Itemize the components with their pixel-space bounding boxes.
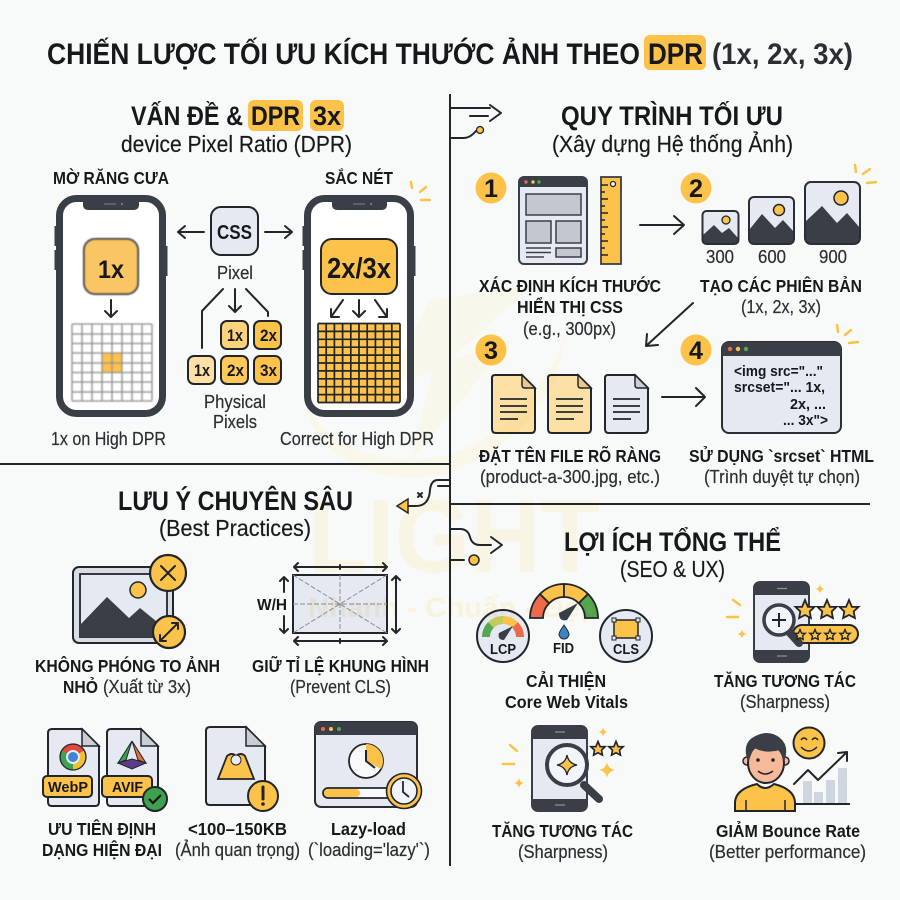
practice: modern formats bbox=[42, 729, 167, 860]
CSS pixel diagram: Pixels bbox=[213, 411, 257, 432]
benefit: engagement with sharpness: TĂNG TƯƠNG TÁC bbox=[492, 820, 633, 841]
phone: 2x/3x sharp bbox=[302, 182, 430, 414]
step 4: <img src="..." bbox=[734, 363, 823, 380]
step 1: XÁC ĐỊNH KÍCH THƯỚC bbox=[479, 275, 661, 296]
title: (1x, 2x, 3x) bbox=[712, 38, 853, 71]
watermark: LIGHT logo bbox=[305, 284, 600, 623]
CSS pixel diagram: 2x bbox=[260, 326, 277, 345]
label: blurry: MỜ RĂNG CƯA bbox=[53, 167, 169, 188]
arrow: step 3 to 4 bbox=[662, 388, 705, 406]
benefit: core web vitals: LCP bbox=[490, 642, 516, 658]
step 4: 4 bbox=[689, 337, 703, 365]
CSS pixel diagram: 2x bbox=[227, 361, 244, 380]
practice: keep aspect ratio: W/H bbox=[257, 597, 287, 614]
heading: best practices bbox=[118, 485, 353, 541]
step 2: TẠO CÁC PHIÊN BẢN bbox=[700, 275, 862, 296]
step 2 bbox=[680, 165, 876, 317]
benefit: core web vitals bbox=[477, 584, 652, 712]
step 4: ... 3x"> bbox=[783, 412, 828, 429]
benefit: core web vitals: CẢI THIỆN bbox=[526, 670, 606, 691]
heading: process bbox=[552, 99, 793, 157]
step 2: (1x, 2x, 3x) bbox=[741, 296, 821, 317]
heading: process: QUY TRÌNH TỐI ƯU bbox=[561, 99, 783, 131]
step 1 bbox=[476, 172, 661, 339]
benefit: engagement with rating: TĂNG TƯƠNG TÁC bbox=[714, 670, 856, 691]
benefit: lower bounce rate: (Better performance) bbox=[709, 841, 866, 862]
panel: overall benefits bbox=[477, 526, 866, 862]
step 4: srcset="... 1x, bbox=[734, 379, 825, 396]
benefit: engagement with sharpness bbox=[492, 726, 633, 862]
heading: best practices: LƯU Ý CHUYÊN SÂU bbox=[118, 485, 353, 516]
practice: lazy load bbox=[308, 722, 430, 860]
benefit: core web vitals: Core Web Vitals bbox=[505, 692, 628, 712]
benefit: engagement with rating: (Sharpness) bbox=[740, 691, 830, 712]
step 4 bbox=[680, 325, 874, 487]
benefit: engagement with sharpness: (Sharpness) bbox=[518, 841, 608, 862]
heading: best practices: (Best Practices) bbox=[159, 515, 311, 541]
practice: modern formats: AVIF bbox=[112, 779, 143, 796]
panel: optimisation process bbox=[476, 99, 876, 487]
CSS pixel diagram: CSS bbox=[217, 222, 252, 244]
practice: no upscaling: (Xuất từ 3x) bbox=[103, 676, 191, 697]
practice: keep aspect ratio: GIỮ TỈ LỆ KHUNG HÌNH bbox=[252, 655, 429, 676]
panel: problem and DPR bbox=[51, 100, 434, 449]
practice: file size bbox=[175, 727, 300, 860]
step 3: ĐẶT TÊN FILE RÕ RÀNG bbox=[479, 445, 661, 466]
arrow: step 2 to 3 bbox=[646, 303, 693, 346]
title: CHIẾN LƯỢC TỐI ƯU KÍCH THƯỚC ẢNH THEO bbox=[47, 37, 640, 71]
heading: problem: DPR bbox=[251, 101, 300, 131]
step 4: (Trình duyệt tự chọn) bbox=[704, 466, 860, 487]
title: DPR bbox=[648, 38, 703, 71]
heading: benefits bbox=[564, 526, 781, 582]
practice: no upscaling: KHÔNG PHÓNG TO ẢNH bbox=[35, 655, 220, 676]
practice: keep aspect ratio: (Prevent CLS) bbox=[290, 676, 391, 697]
step 3 bbox=[476, 334, 661, 487]
benefit: lower bounce rate bbox=[709, 728, 866, 862]
CSS pixel diagram: 1x bbox=[194, 361, 210, 380]
phone: 1x blurry: 1x bbox=[98, 256, 124, 284]
step 1: (e.g., 300px) bbox=[523, 318, 616, 339]
arrow: step 1 to 2 bbox=[640, 216, 684, 234]
step 2: 600 bbox=[758, 246, 786, 267]
practice: modern formats: DẠNG HIỆN ĐẠI bbox=[42, 839, 162, 860]
step 2: 300 bbox=[706, 246, 734, 267]
phone: 2x/3x sharp: 2x/3x bbox=[327, 253, 391, 285]
practice: lazy load: Lazy-load bbox=[331, 819, 406, 839]
CSS pixel diagram bbox=[178, 207, 292, 432]
CSS pixel diagram: Physical bbox=[204, 391, 266, 412]
caption: 1x: 1x on High DPR bbox=[51, 428, 166, 449]
practice: modern formats: ƯU TIÊN ĐỊNH bbox=[48, 818, 156, 839]
phone: 1x blurry bbox=[54, 198, 168, 414]
step 1: HIỂN THỊ CSS bbox=[517, 296, 623, 317]
step 3: 3 bbox=[484, 337, 498, 365]
heading: problem: device Pixel Ratio (DPR) bbox=[121, 131, 352, 157]
step 4: 2x, ... bbox=[790, 396, 826, 413]
heading: problem: 3x bbox=[313, 101, 341, 131]
heading: process: (Xây dựng Hệ thống Ảnh) bbox=[552, 129, 793, 157]
step 2: 2 bbox=[689, 175, 703, 203]
CSS pixel diagram: 1x bbox=[227, 326, 243, 345]
heading: problem bbox=[121, 100, 352, 157]
benefit: engagement with rating bbox=[714, 582, 858, 712]
heading: problem: VẤN ĐỀ & bbox=[131, 100, 243, 131]
watermark: LIGHT logo: LIGHT bbox=[308, 479, 600, 595]
practice: no upscaling bbox=[35, 555, 220, 697]
practice: keep aspect ratio bbox=[252, 563, 429, 697]
panel: best practices bbox=[35, 485, 430, 860]
step 4: SỬ DỤNG `srcset` HTML bbox=[689, 445, 874, 466]
CSS pixel diagram: Pixel bbox=[217, 262, 253, 283]
label: sharp: SẮC NÉT bbox=[325, 167, 393, 188]
practice: file size: <100–150KB bbox=[188, 819, 287, 839]
heading: benefits: LỢI ÍCH TỔNG THỂ bbox=[564, 526, 781, 557]
step 3: (product-a-300.jpg, etc.) bbox=[480, 466, 660, 487]
step 1: 1 bbox=[484, 175, 498, 203]
practice: modern formats: WebP bbox=[48, 779, 88, 796]
watermark: LIGHT logo: Nhanh - Chuẩn - Đẹp bbox=[308, 592, 598, 623]
practice: lazy load: (`loading='lazy'`) bbox=[308, 839, 430, 860]
benefit: core web vitals: CLS bbox=[613, 642, 639, 658]
practice: no upscaling: NHỎ bbox=[63, 676, 98, 697]
benefit: lower bounce rate: GIẢM Bounce Rate bbox=[716, 820, 860, 841]
step 2: 900 bbox=[819, 246, 847, 267]
caption: correct: Correct for High DPR bbox=[280, 428, 434, 449]
CSS pixel diagram: 3x bbox=[260, 361, 277, 380]
heading: benefits: (SEO & UX) bbox=[620, 556, 725, 582]
benefit: core web vitals: FID bbox=[553, 641, 574, 657]
practice: file size: (Ảnh quan trọng) bbox=[175, 839, 300, 860]
